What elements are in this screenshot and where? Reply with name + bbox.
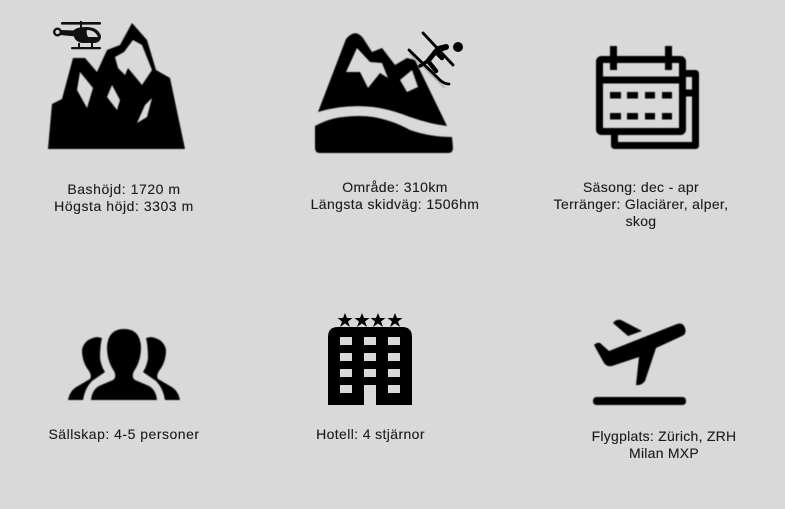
text: airports bbox=[592, 428, 736, 461]
icon: hotel bbox=[328, 313, 412, 405]
text: party size: Sällskap: 4-5 personer bbox=[48, 426, 200, 442]
icon: helicopter bbox=[54, 21, 101, 49]
text: area: Område: 310km bbox=[342, 179, 448, 195]
text: airports: Flygplats: Zürich, ZRH bbox=[592, 428, 736, 444]
text: season: Säsong: dec - apr bbox=[583, 179, 699, 195]
text: altitude bbox=[54, 181, 194, 214]
text: season: Terränger: Glaciärer, alper, bbox=[554, 196, 728, 212]
text: hotel: Hotell: 4 stjärnor bbox=[316, 426, 425, 442]
icon: skier bbox=[409, 33, 463, 87]
icon: four stars bbox=[338, 313, 402, 327]
text: season: skog bbox=[626, 213, 656, 229]
icon: rocky mountain bbox=[48, 23, 185, 149]
text: airports: Milan MXP bbox=[629, 445, 699, 461]
text: area bbox=[311, 179, 479, 212]
text: altitude: Högsta höjd: 3303 m bbox=[54, 198, 194, 214]
icon: ski mountain bbox=[315, 33, 453, 153]
icon: group of people bbox=[68, 329, 180, 400]
text: altitude: Bashöjd: 1720 m bbox=[67, 181, 181, 197]
text: area: Längsta skidväg: 1506hm bbox=[311, 196, 479, 212]
text: season bbox=[554, 179, 728, 229]
icon: calendar bbox=[599, 46, 697, 146]
icon: departing plane bbox=[593, 320, 686, 405]
